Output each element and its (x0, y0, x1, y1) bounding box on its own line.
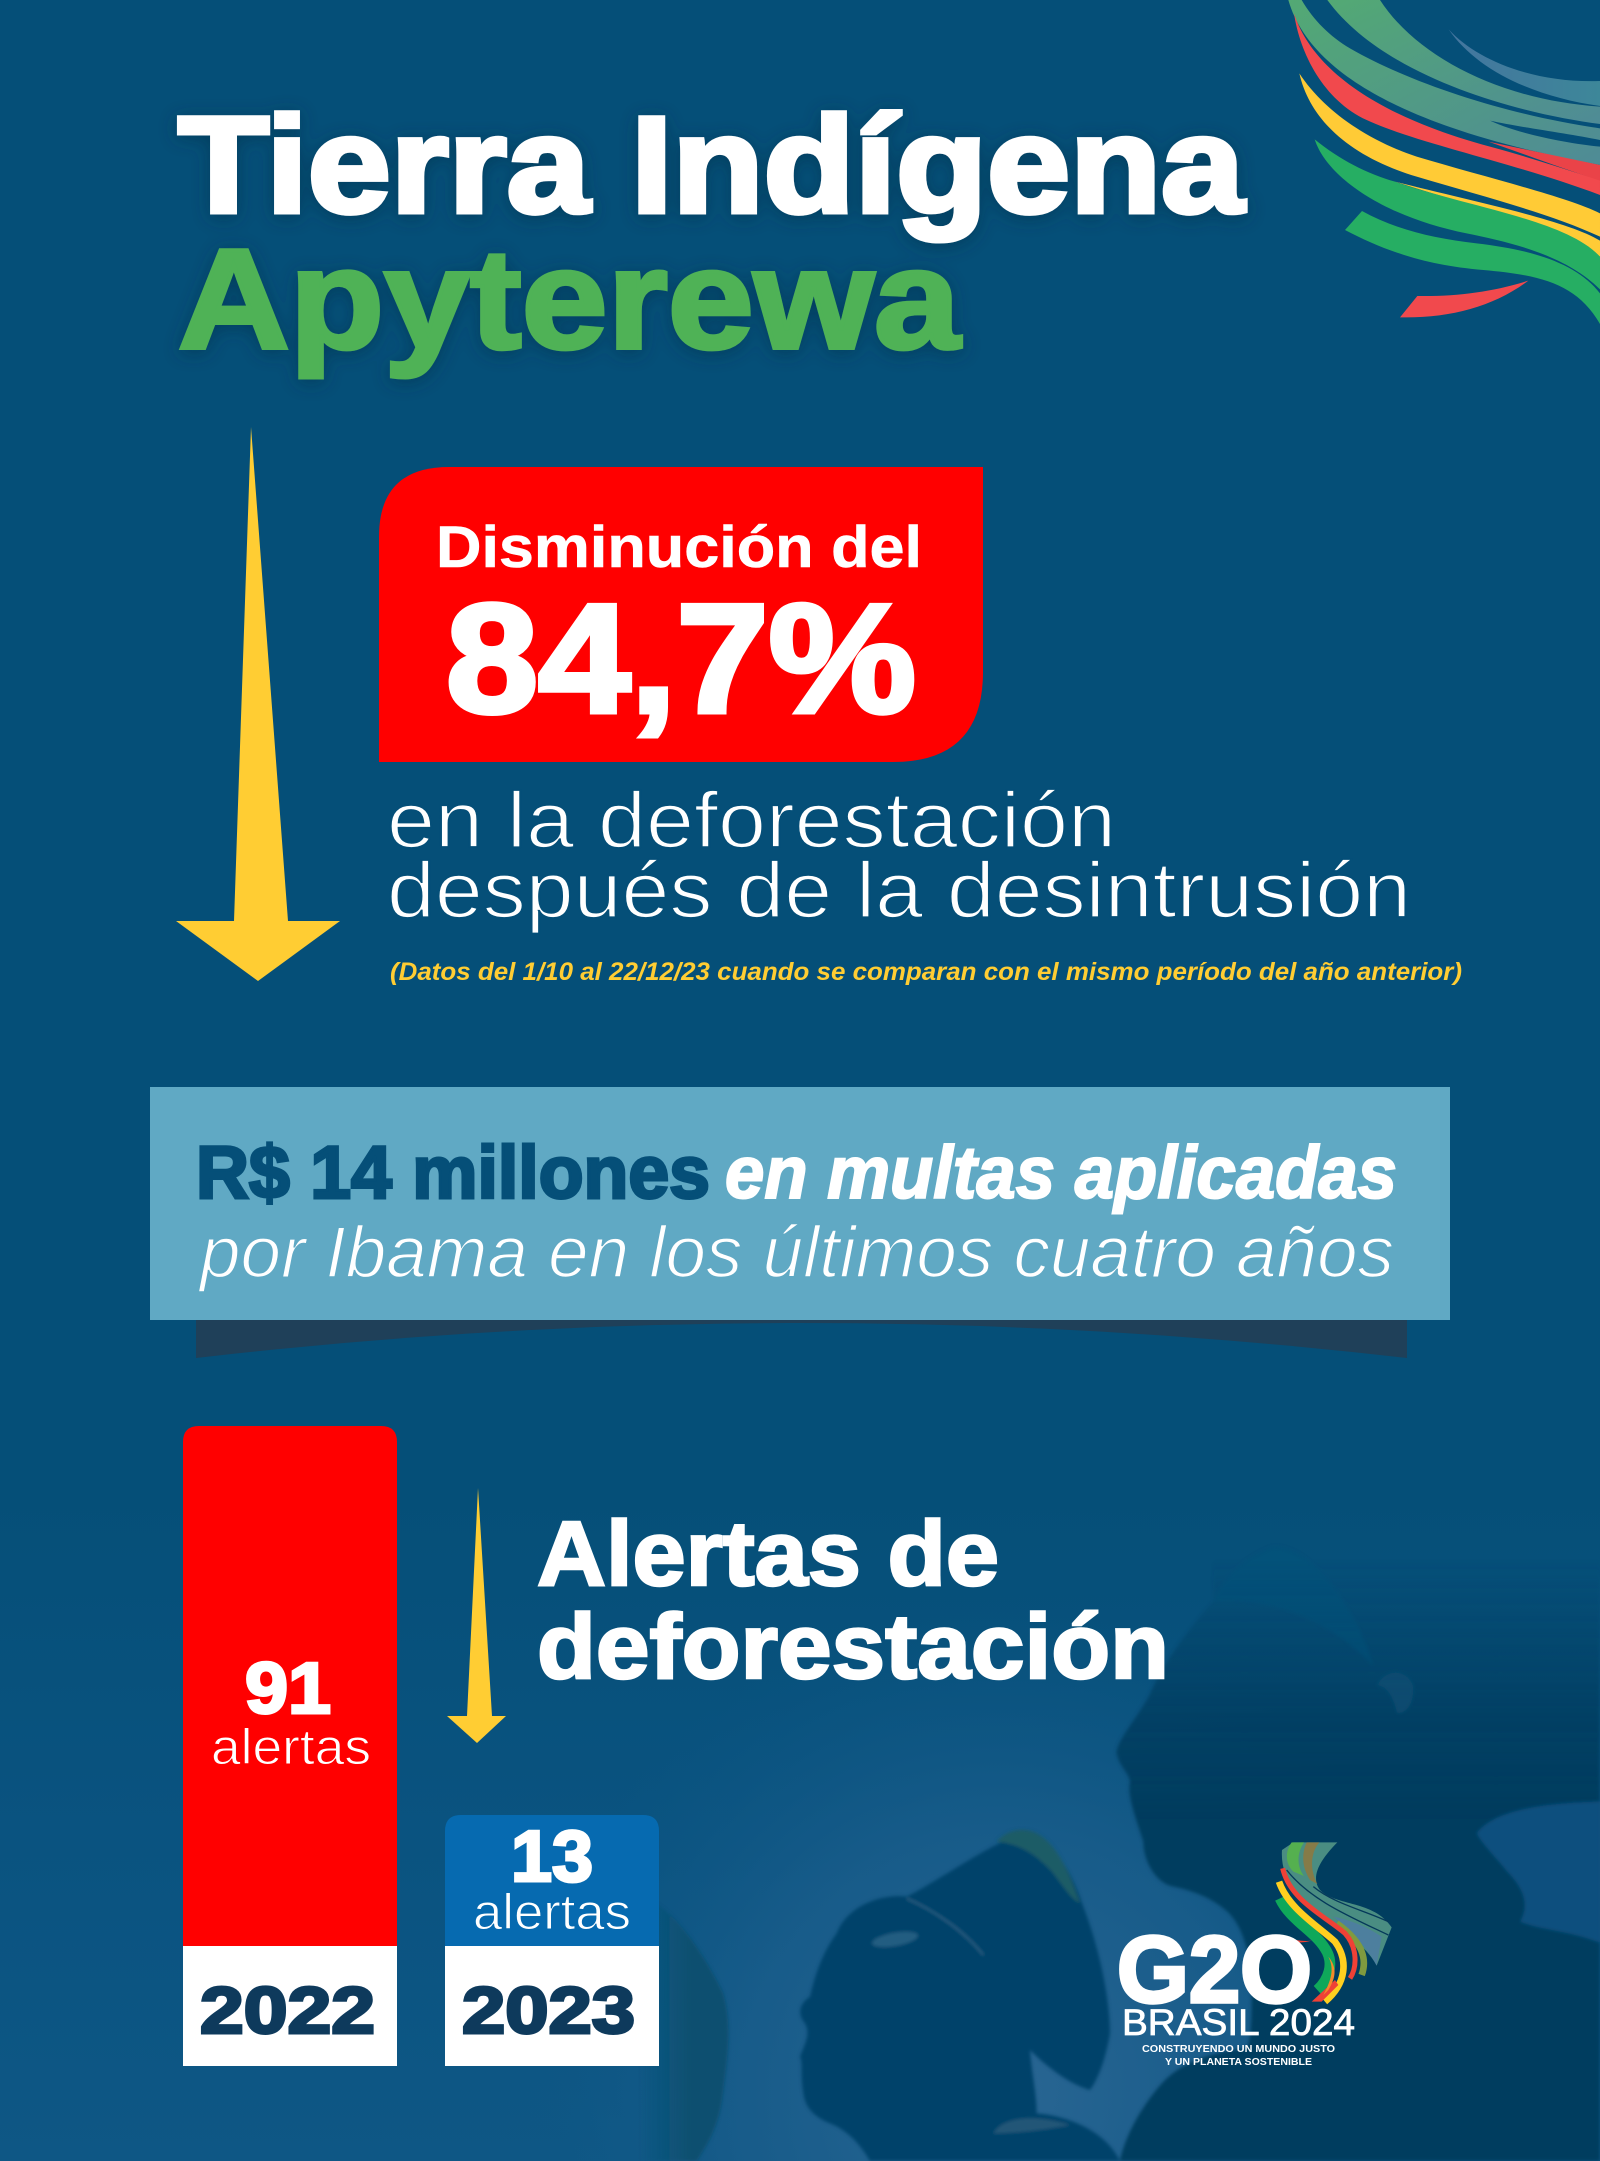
heading: alertas de deforestación: deforestación (537, 1596, 1169, 1698)
bar: 2023: alertas (473, 1884, 631, 1940)
callout: red box with 84,7% (379, 467, 983, 762)
callout: red box with 84,7%: Disminución del (436, 515, 922, 580)
silhouette: person with headdress (800, 1830, 1120, 2161)
bar: 2023 (445, 1815, 659, 2066)
logo: G20 Brasil 2024: Y UN PLANETA SOSTENIBLE (1165, 2056, 1312, 2068)
logo: G20 Brasil 2024 (1117, 1842, 1392, 2068)
bar: 2022 (183, 1426, 397, 2066)
silhouette: person in profile, right (1117, 1500, 1600, 2161)
bar: 2023: 2023 (462, 1973, 635, 2047)
bar: 2022: 2022 (200, 1973, 375, 2047)
bar chart: alerts 2022 vs 2023 (183, 1426, 659, 2066)
text: deforestation subtitle: en la deforestación (387, 775, 1116, 864)
bar: 2022: alertas (211, 1719, 371, 1775)
silhouette: left feather fan (640, 1890, 728, 2161)
title: Tierra Indígena (178, 89, 1246, 242)
logo: G20 Brasil 2024: BRASIL 2024 (1122, 2002, 1355, 2043)
callout: red box with 84,7%: 84,7% (446, 572, 916, 745)
icon: large yellow down arrow (176, 427, 340, 981)
text: deforestation subtitle: después de la desintrusión (387, 845, 1411, 934)
heading: alertas de deforestación: Alertas de (537, 1503, 999, 1605)
bar: 2023: 13 (511, 1817, 593, 1897)
icon: logo swoosh (1279, 1842, 1392, 2002)
logo: G20 Brasil 2024: G2O (1117, 1917, 1312, 2023)
text: data footnote: (Datos del 1/10 al 22/12/23 cuando se comparan con el mismo período del año anterior) (390, 958, 1462, 986)
panel: fines banner: por Ibama en los últimos cuatro años (198, 1213, 1394, 1293)
panel: fines banner: R$ 14 millones (196, 1131, 710, 1214)
text: deforestation subtitle (387, 775, 1411, 934)
logo: G20 Brasil 2024: CONSTRUYENDO UN MUNDO JUSTO (1142, 2043, 1335, 2055)
icon: small yellow down arrow (447, 1488, 506, 1743)
bar: 2022: 91 (245, 1649, 331, 1729)
title: Apyterewa (178, 220, 961, 379)
background photo: silhouettes of indigenous people (640, 1500, 1600, 2161)
title (178, 89, 1246, 379)
decorative swoosh top right (1288, 0, 1600, 324)
panel: fines banner (150, 1087, 1450, 1358)
heading: alertas de deforestación (537, 1503, 1169, 1698)
panel: fines banner: en multas aplicadas (725, 1131, 1397, 1214)
